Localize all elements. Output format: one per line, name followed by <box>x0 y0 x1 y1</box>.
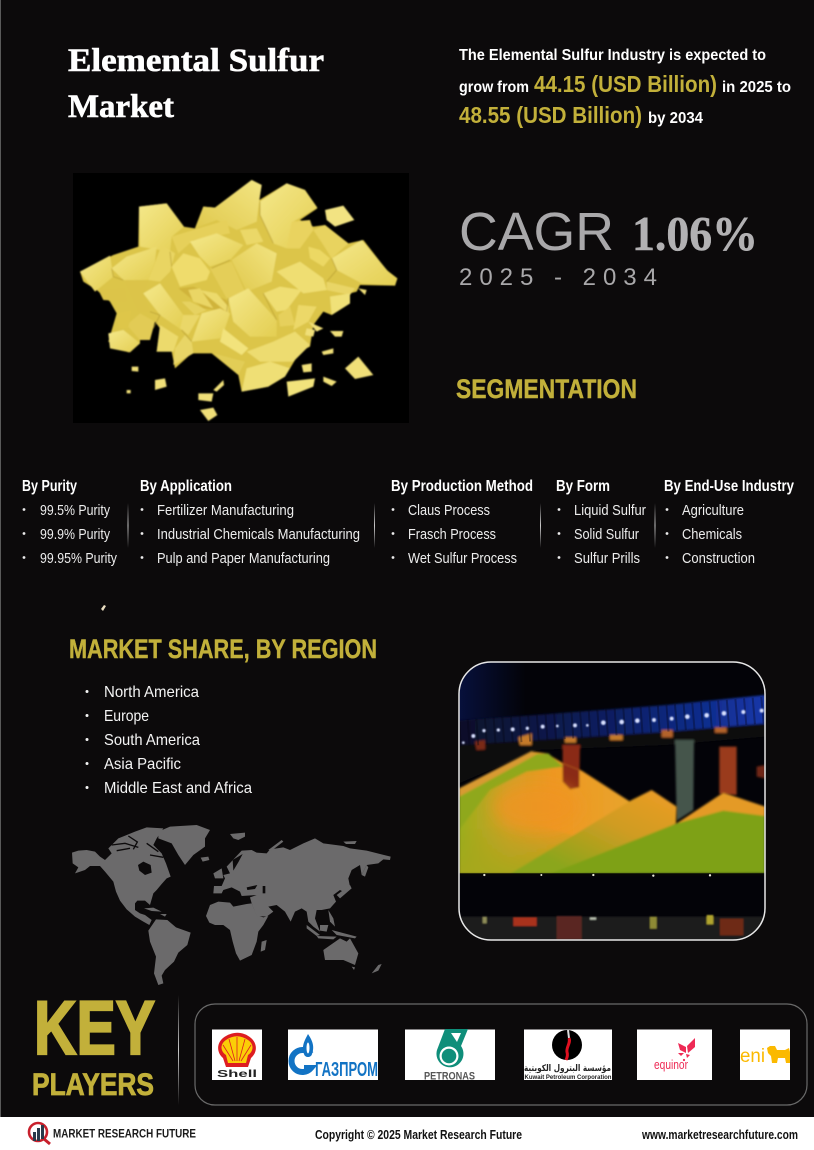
column: by production method: Frasch Process <box>408 527 496 543</box>
column: by form: By Form <box>556 478 610 495</box>
logo: petronas: PETRONAS <box>424 1070 475 1082</box>
column: by form: Liquid Sulfur <box>574 503 646 519</box>
column: by purity: 99.9% Purity <box>40 527 111 543</box>
column: by application: Fertilizer Manufacturing <box>157 503 294 519</box>
column: by production method: Wet Sulfur Process <box>408 551 517 567</box>
heading: market share by region: MARKET SHARE, BY REGION <box>69 634 377 664</box>
market size summary text: 44.15 (USD Billion) <box>534 71 717 97</box>
footer bar <box>0 1117 814 1150</box>
column: by application: Industrial Chemicals Manufacturing <box>157 527 360 543</box>
market size summary text: The Elemental Sulfur Industry is expected to <box>459 47 766 64</box>
column: by purity <box>22 478 118 567</box>
column: by end-use industry: Construction <box>682 551 755 567</box>
column: by purity: 99.95% Purity <box>40 551 118 567</box>
market size summary text: grow from <box>459 79 529 96</box>
logo: shell: Shell <box>217 1068 257 1080</box>
CAGR figure: CAGR <box>459 202 614 262</box>
column: by application: Pulp and Paper Manufacturing <box>157 551 330 567</box>
column: by purity: By Purity <box>22 478 77 495</box>
region list: Asia Pacific <box>104 756 181 773</box>
key players panel <box>195 1004 807 1105</box>
region list: Europe <box>104 708 149 725</box>
column: by form: Sulfur Prills <box>574 551 640 567</box>
title: Elemental Sulfur <box>68 43 324 79</box>
CAGR figure: 1.06% <box>632 206 758 261</box>
logo: market research future: MARKET RESEARCH FUTURE <box>53 1128 196 1140</box>
column: by production method: Claus Process <box>408 503 490 519</box>
segmentation columns <box>22 478 794 567</box>
market size summary text: by 2034 <box>648 110 703 127</box>
logo: eni <box>740 1030 790 1080</box>
column: by form: Solid Sulfur <box>574 527 639 543</box>
CAGR figure: 2025 - 2034 <box>459 264 657 291</box>
logo: kuwait petroleum corporation <box>524 1030 612 1081</box>
logo: gazprom <box>288 1030 378 1081</box>
photo: sulfur piles under bridge <box>459 662 765 942</box>
region list: Middle East and Africa <box>104 780 252 797</box>
heading: key players: KEY <box>34 986 155 1071</box>
region list: South America <box>104 732 200 749</box>
market size summary text: in 2025 to <box>722 79 791 96</box>
column: by form <box>556 478 646 567</box>
region list: North America <box>104 684 199 701</box>
logo: shell <box>212 1030 262 1080</box>
heading: segmentation: SEGMENTATION <box>456 374 637 404</box>
logo: eni: eni <box>740 1046 765 1067</box>
logo: equinor: equinor <box>654 1058 688 1072</box>
column: by end-use industry: Chemicals <box>682 527 742 543</box>
logo: equinor <box>637 1030 712 1080</box>
region list <box>86 684 252 797</box>
market size summary text <box>459 47 791 128</box>
CAGR figure <box>459 202 758 291</box>
world map <box>72 825 391 985</box>
column: by application <box>140 478 360 567</box>
column: by end-use industry <box>664 478 794 567</box>
column: by end-use industry: Agriculture <box>682 503 744 519</box>
photo: sulfur chunks <box>73 173 409 423</box>
title <box>68 43 324 125</box>
heading: key players: PLAYERS <box>32 1066 154 1102</box>
logo: kuwait petroleum corporation: Kuwait Petroleum Corporation <box>524 1074 612 1081</box>
column: by purity: 99.5% Purity <box>40 503 111 519</box>
copyright: Copyright © 2025 Market Research Future <box>315 1127 522 1142</box>
heading: key players <box>32 986 155 1102</box>
logo: petronas <box>405 1029 495 1082</box>
title: Market <box>68 89 174 125</box>
logo: gazprom: ГАЗПРОМ <box>315 1059 378 1081</box>
market size summary text: 48.55 (USD Billion) <box>459 102 642 128</box>
column: by production method: By Production Method <box>391 478 533 495</box>
column: by production method <box>391 478 533 567</box>
column: by application: By Application <box>140 478 232 495</box>
logo: kuwait petroleum corporation: مؤسسة البترول الكويتية <box>524 1064 611 1074</box>
logo: market research future <box>29 1123 196 1144</box>
